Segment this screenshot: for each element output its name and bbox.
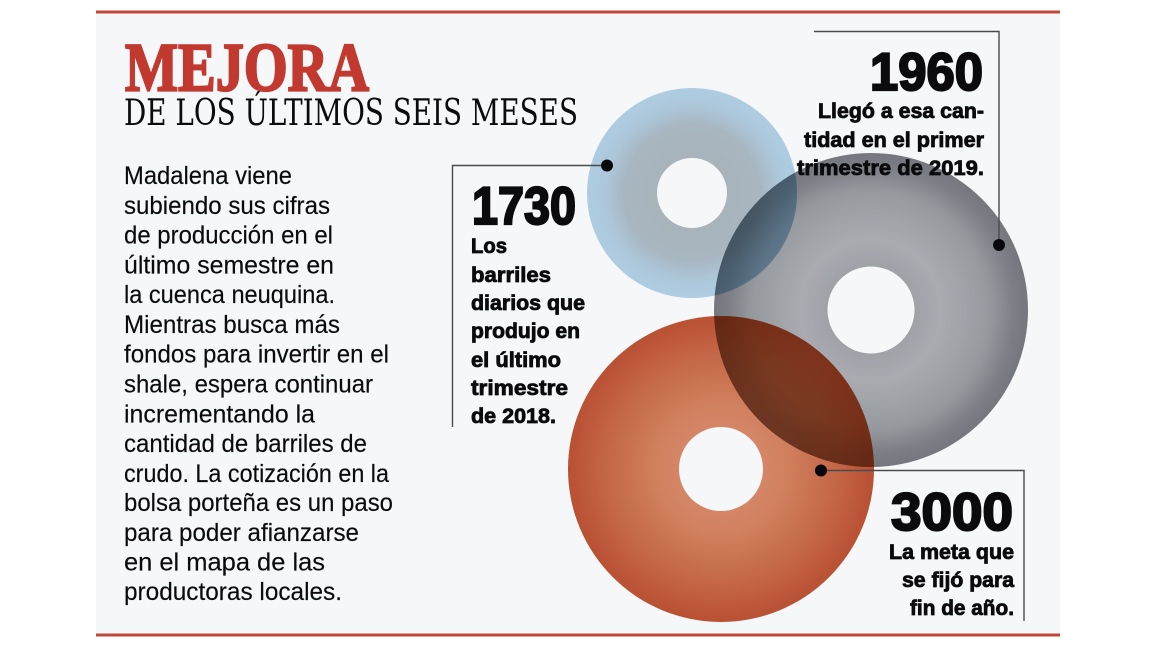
text 1730: trimestre [471, 376, 568, 400]
body text block: incrementando la [124, 400, 315, 428]
title: MEJORA: MEJORA [125, 30, 369, 106]
text 1730 [471, 234, 585, 428]
body text block [124, 162, 393, 606]
body text block: shale, espera continuar [124, 370, 373, 398]
body text block: Madalena viene [124, 162, 292, 190]
text 1960: trimestre de 2019. [797, 156, 984, 180]
donut: gray 1960 [714, 153, 1028, 467]
number 1960: 1960 [870, 43, 983, 102]
text 1730: Los [471, 234, 507, 258]
text 1730: diarios que [471, 291, 585, 315]
body text block: la cuenca neuquina. [124, 281, 335, 309]
callout 1730 leader [452, 160, 613, 427]
body text block: de producción en el [124, 222, 333, 250]
text 3000: La meta que [889, 540, 1014, 564]
callout 1960 leader [814, 32, 1005, 251]
subtitle: DE LOS ÚLTIMOS SEIS MESES [124, 92, 578, 134]
text 1730: de 2018. [471, 404, 556, 428]
text 3000 [889, 540, 1015, 620]
text 3000: se fijó para [902, 568, 1015, 592]
body text block: para poder afianzarse [124, 519, 359, 547]
text 1960: Llegó a esa can- [818, 99, 984, 123]
body text block: subiendo sus cifras [124, 192, 330, 220]
gray and orange overlap tint [714, 316, 874, 467]
panel background [96, 11, 1060, 636]
body text block: bolsa porteña es un paso [124, 489, 393, 517]
text 1730: el último [471, 348, 561, 372]
text 1730: barriles [471, 263, 551, 287]
bottom red rule [96, 634, 1060, 636]
top red rule [96, 10, 1060, 14]
body text block: crudo. La cotización en la [124, 460, 389, 488]
callout 3000 leader [815, 464, 1024, 621]
body text block: en el mapa de las [124, 549, 325, 577]
number 3000: 3000 [891, 483, 1013, 542]
text 1960 [797, 99, 985, 180]
body text block: Mientras busca más [124, 311, 340, 339]
text 1730: produjo en [471, 319, 580, 343]
body text block: cantidad de barriles de [124, 430, 367, 458]
donut: blue 1730 [587, 88, 797, 298]
text 3000: fin de año. [910, 596, 1014, 620]
body text block: fondos para invertir en el [124, 340, 389, 368]
body text block: productoras locales. [124, 578, 342, 606]
body text block: último semestre en [124, 252, 334, 280]
gray and blue overlap tint [714, 172, 797, 296]
text 1960: tidad en el primer [804, 128, 985, 152]
number 1730: 1730 [472, 177, 576, 236]
donut: orange 3000 [568, 316, 874, 622]
